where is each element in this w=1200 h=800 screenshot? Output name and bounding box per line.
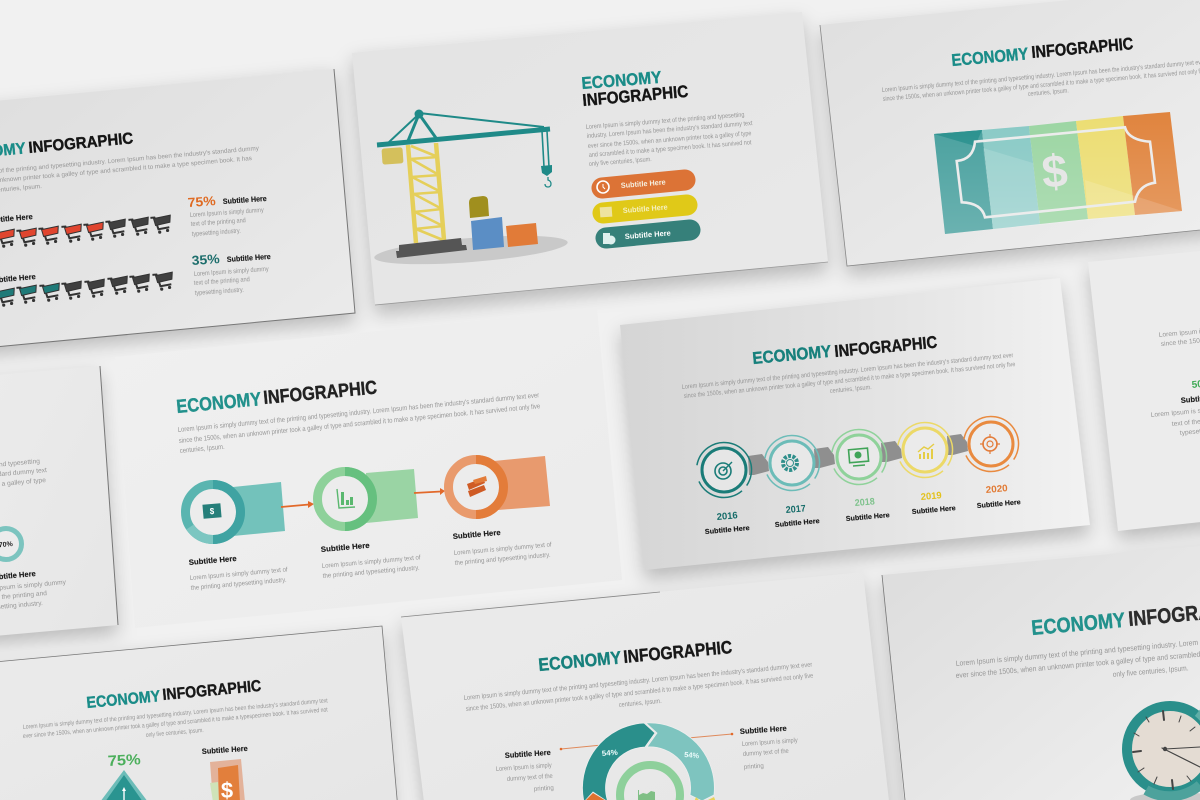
stat: 35 percent: typesetting industry. <box>195 287 244 297</box>
heading: banknote slide: ECONOMY <box>951 44 1030 70</box>
heading: donut slide <box>538 637 733 675</box>
panel: process flow slide <box>115 309 622 628</box>
crane mast <box>408 143 444 243</box>
text block: flow intro <box>178 392 541 455</box>
callout: left subtitle <box>496 748 554 793</box>
callout: left subtitle: printing <box>534 785 554 793</box>
text block: clock intro: only five centuries, Ipsum. <box>1112 663 1189 679</box>
step three caption: Lorem Ipsum is simply dummy text of <box>454 541 552 557</box>
text block: flow intro: centuries, Ipsum. <box>180 444 225 455</box>
callout: right subtitle: Lorem Ipsum is simply <box>742 737 799 748</box>
panel: partial percent slide <box>0 366 118 636</box>
step one caption <box>188 554 288 592</box>
pill: yellow subtitle: Subtitle Here <box>622 202 668 215</box>
callout: right subtitle: printing <box>744 763 764 771</box>
pill: orange subtitle: Subtitle Here <box>620 177 666 190</box>
heading: timeline slide: ECONOMY <box>752 342 833 368</box>
heading: flow slide: INFOGRAPHIC <box>263 378 378 409</box>
heading: flow slide: ECONOMY <box>176 389 262 418</box>
stat: 75 percent pyramid <box>100 751 148 800</box>
milestone 2016: 2016 <box>716 510 738 523</box>
heading: bottom left slide: ECONOMY <box>86 688 161 712</box>
step two caption <box>320 541 421 580</box>
stat: 75 percent: Subtitle Here <box>223 194 267 206</box>
text block: crane slide intro: Lorem Ipsum is simply dummy text of the printing and typesetting <box>586 112 745 131</box>
step one: banknote circle: $ <box>210 507 215 516</box>
text block: crane slide intro: industry. Lorem Ipsum has been the industry's standard dummy text <box>587 120 753 140</box>
heading: timeline slide: INFOGRAPHIC <box>834 333 938 361</box>
text block: crane slide intro: only five centuries, Ipsum. <box>589 156 652 168</box>
crane jib <box>377 113 550 167</box>
step one caption: Subtitle Here <box>188 554 237 567</box>
step one: banknote circle <box>186 482 285 540</box>
text block: donut intro: since the 1500s, when an unknown printer took a galley of type and scrambled it to make a type specimen book. It has survived not only five <box>466 673 814 713</box>
milestone 2020: Subtitle Here <box>977 499 1021 510</box>
stat: 75 percent <box>187 193 267 238</box>
banknote frame <box>957 127 1155 217</box>
milestone 2017 <box>760 431 824 529</box>
text block: flow intro: since the 1500s, when an unknown printer took a galley of type and scrambled it to make a type specimen book. It has survived not only five <box>179 403 541 445</box>
panel: banknote slide <box>820 0 1200 266</box>
milestone 2019: 2019 <box>920 490 942 503</box>
milestone 2019 <box>893 418 957 516</box>
heading: crane slide: INFOGRAPHIC <box>582 82 689 110</box>
stat: 35 percent <box>191 251 271 297</box>
text block: timeline intro: since the 1500s, when an unknown printer took a galley of type and scrambled it to make a type specimen book. It has survived not only five <box>684 361 1016 400</box>
step two: chart circle <box>318 469 418 526</box>
stat: 35 percent: Lorem Ipsum is simply dummy <box>194 266 270 278</box>
text block: crane slide intro <box>586 112 753 168</box>
text block: banknote slide intro: centuries, Ipsum. <box>1028 87 1069 98</box>
callout: right subtitle: dummy text of the <box>743 748 789 758</box>
heading: clock slide <box>1030 597 1200 640</box>
stat: 75 percent: typesetting industry. <box>192 228 241 238</box>
milestone 2018 <box>827 425 891 523</box>
pill: orange subtitle <box>597 177 685 193</box>
panel: crane slide <box>352 12 828 305</box>
stat: 35 percent: 35% <box>191 251 221 268</box>
heading: donut slide: INFOGRAPHIC <box>623 637 733 667</box>
milestone 2016: Subtitle Here <box>705 525 750 536</box>
text block: partial subtitle <box>0 569 67 612</box>
callout: left subtitle: dummy text of the <box>507 773 553 783</box>
panel: timeline slide <box>620 278 1090 570</box>
text block: partial intro <box>0 458 47 489</box>
heading: bottom left slide: INFOGRAPHIC <box>162 678 262 704</box>
milestone 2020 <box>959 412 1023 510</box>
heading: banknote slide <box>951 34 1134 70</box>
text block: crane slide intro: ever since the 1500s, when an unknown printer took a galley of type <box>588 130 752 150</box>
chart: banknote <box>934 112 1182 234</box>
step three caption <box>452 528 552 567</box>
callout lines <box>688 734 732 738</box>
stat: 75 percent pyramid: 75% <box>107 751 141 770</box>
stat: partial 50 percent <box>1151 378 1200 437</box>
cart row: 35 percent <box>0 272 174 307</box>
arrow: step two to three <box>414 488 445 495</box>
chart: donut: 54% <box>601 748 618 758</box>
stat: 75 percent: text of the printing and <box>191 217 246 228</box>
banknote column: Subtitle Here <box>202 744 248 756</box>
milestone 2017: Subtitle Here <box>775 518 820 529</box>
heading: crane slide <box>581 68 689 110</box>
arrow: step one to two <box>281 501 314 508</box>
step three caption: Subtitle Here <box>452 528 501 541</box>
heading: crane slide: ECONOMY <box>581 68 663 93</box>
panel: clock slide <box>882 545 1200 800</box>
step two caption: Lorem Ipsum is simply dummy text of <box>322 554 421 570</box>
stat: 35 percent: text of the printing and <box>194 276 250 287</box>
timeline connectors <box>748 434 968 475</box>
step three caption: the printing and typesetting industry. <box>455 552 551 567</box>
text block: bottom left intro: ever since the 1500s, when an unknown printer took a galley of type and scrambled it to make a typespecimen book. It has survived not <box>23 706 328 740</box>
milestone 2016 <box>692 438 756 536</box>
chart: donut <box>560 723 733 800</box>
chart: donut: 54% <box>684 750 700 760</box>
stat: 75 percent: Lorem Ipsum is simply dummy <box>190 207 265 219</box>
text block: donut intro: Lorem Ipsum is simply dummy text of the printing and typesetting industry. Lorem Ipsum has been the industry's standard dummy text ever <box>464 661 813 702</box>
callout: right subtitle: Subtitle Here <box>740 724 787 736</box>
text block: partial right intro <box>1159 326 1200 348</box>
text block: bottom left intro: only five centuries, Ipsum. <box>146 727 204 739</box>
pill: teal subtitle <box>603 228 690 244</box>
chart: tower crane illustration <box>373 110 569 270</box>
milestone 2018: Subtitle Here <box>846 512 890 523</box>
pill: yellow subtitle <box>600 202 687 217</box>
milestone 2020: 2020 <box>985 483 1008 496</box>
dollar sign: $ <box>1040 144 1070 198</box>
stat: 75 percent: 75% <box>187 193 217 210</box>
cargo boxes <box>471 217 504 250</box>
heading: cart slide: INFOGRAPHIC <box>28 130 134 157</box>
step one caption: the printing and typesetting industry. <box>191 577 287 592</box>
callout: right subtitle <box>740 724 799 771</box>
text block: crane slide intro: and scrambled it to make a type specimen book. It has survived not <box>589 139 752 159</box>
milestone 2018: 2018 <box>854 496 875 509</box>
heading: donut slide: ECONOMY <box>538 647 622 675</box>
heading: flow slide <box>176 378 378 418</box>
pill: teal subtitle: Subtitle Here <box>624 228 671 241</box>
crane counterweight <box>381 147 404 165</box>
heading: cart slide <box>0 130 134 164</box>
text block: timeline intro: centuries, Ipsum. <box>830 384 872 395</box>
milestone 2019: Subtitle Here <box>912 505 956 516</box>
step one caption: Lorem Ipsum is simply dummy text of <box>190 566 288 582</box>
callout: left subtitle: Subtitle Here <box>505 748 551 760</box>
heading: clock slide: ECONOMY <box>1030 609 1126 640</box>
ground shadow <box>373 230 569 270</box>
milestone 2017: 2017 <box>785 503 806 516</box>
panel: partial right slide <box>1088 250 1200 531</box>
callout: left subtitle: Lorem Ipsum is simply <box>496 762 553 773</box>
text block: bottom left intro: Lorem Ipsum is simply dummy text of the printing and typesetting industry. Lorem Ipsum has been the industry's standard dummy text <box>23 697 328 731</box>
stat: 35 percent: Subtitle Here <box>227 252 271 264</box>
panel: bottom left slide <box>0 626 398 800</box>
text block: flow intro: Lorem Ipsum is simply dummy text of the printing and typesetting industry. Lorem Ipsum has been the industry's standard dummy text ever <box>178 392 540 434</box>
banknote column <box>202 744 248 800</box>
donut: 70 percent <box>0 528 22 560</box>
crane base <box>396 238 467 258</box>
cart row: 75 percent <box>0 215 172 248</box>
text block: timeline intro: Lorem Ipsum is simply dummy text of the printing and typesetting industry. Lorem Ipsum has been the industry's standard dummy text ever <box>682 352 1014 391</box>
panel: donut slide <box>401 572 890 800</box>
panel: shopping cart slide <box>0 69 355 347</box>
step two caption: Subtitle Here <box>320 541 370 554</box>
heading: banknote slide: INFOGRAPHIC <box>1031 34 1134 62</box>
icon: clock <box>1127 706 1200 800</box>
crane hook <box>541 165 552 176</box>
heading: timeline slide <box>752 333 938 368</box>
step three: cards circle <box>448 456 550 514</box>
heading: bottom left slide <box>86 678 262 712</box>
step two caption: the printing and typesetting industry. <box>323 565 420 580</box>
text block: donut intro: centuries, Ipsum. <box>619 698 662 709</box>
